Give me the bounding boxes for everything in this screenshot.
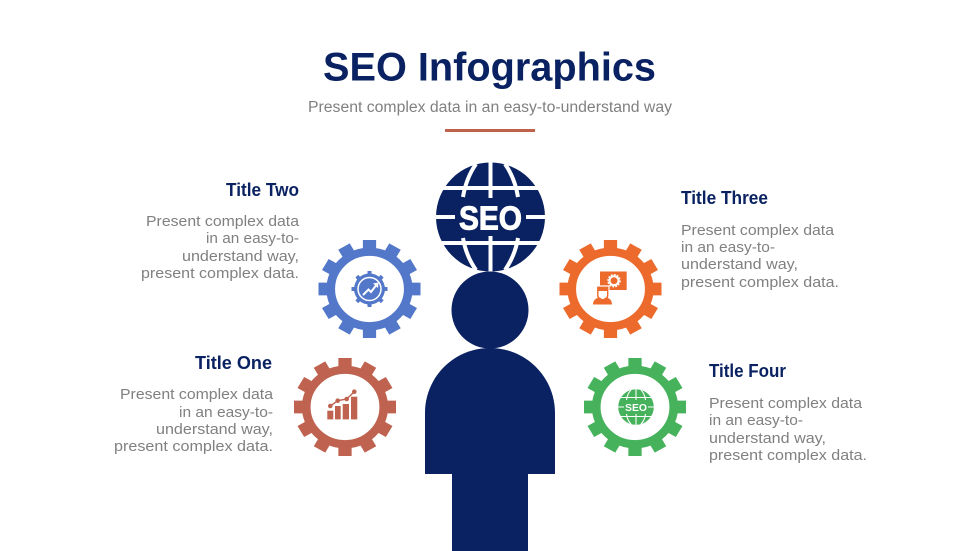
- title: SEO Infographics: [323, 46, 656, 90]
- text: title three body: present complex data.: [681, 274, 839, 291]
- icon: green gear with SEO globe: [584, 358, 686, 456]
- text: title four body: Present complex data: [709, 395, 863, 412]
- heading: title one: Title One: [195, 353, 272, 373]
- text: title one body: present complex data.: [114, 438, 273, 455]
- icon: brown gear with bar chart: [294, 358, 396, 456]
- text: title four body: in an easy-to-: [709, 412, 803, 429]
- title underline: [445, 129, 535, 132]
- text: title three body: in an easy-to-: [681, 239, 775, 256]
- text: title four body: understand way,: [709, 430, 826, 447]
- text: title two body: in an easy-to-: [206, 230, 299, 247]
- text: title one body: [114, 386, 274, 455]
- icon: orange gear with presenter: [560, 240, 662, 338]
- icon: SEO globe: SEO: [459, 200, 522, 236]
- text: title one body: Present complex data: [120, 386, 274, 403]
- text: title three body: Present complex data: [681, 222, 835, 239]
- text: title one body: in an easy-to-: [179, 404, 273, 421]
- icon: blue gear with growth arrow: [318, 240, 420, 338]
- icon: SEO globe: [430, 160, 551, 274]
- text: title three body: understand way,: [681, 256, 798, 273]
- text: title two body: understand way,: [182, 248, 299, 265]
- text: title four body: present complex data.: [709, 447, 867, 464]
- panel: title four: [709, 361, 867, 464]
- text: title two body: present complex data.: [141, 265, 299, 282]
- heading: title two: Title Two: [226, 180, 299, 200]
- text: title one body: understand way,: [156, 421, 273, 438]
- panel: title three: [681, 188, 839, 291]
- text: title four body: [709, 395, 867, 464]
- heading: title four: Title Four: [709, 361, 786, 381]
- panel: title one: [114, 353, 274, 455]
- panel: title two: [141, 180, 300, 282]
- person figure: [425, 272, 555, 551]
- text: title two body: Present complex data: [146, 213, 300, 230]
- text: title two body: [141, 213, 300, 282]
- icon: green gear with SEO globe: SEO: [625, 402, 647, 414]
- subtitle: Present complex data in an easy-to-understand way: [308, 99, 672, 116]
- heading: title three: Title Three: [681, 188, 768, 208]
- text: title three body: [681, 222, 839, 291]
